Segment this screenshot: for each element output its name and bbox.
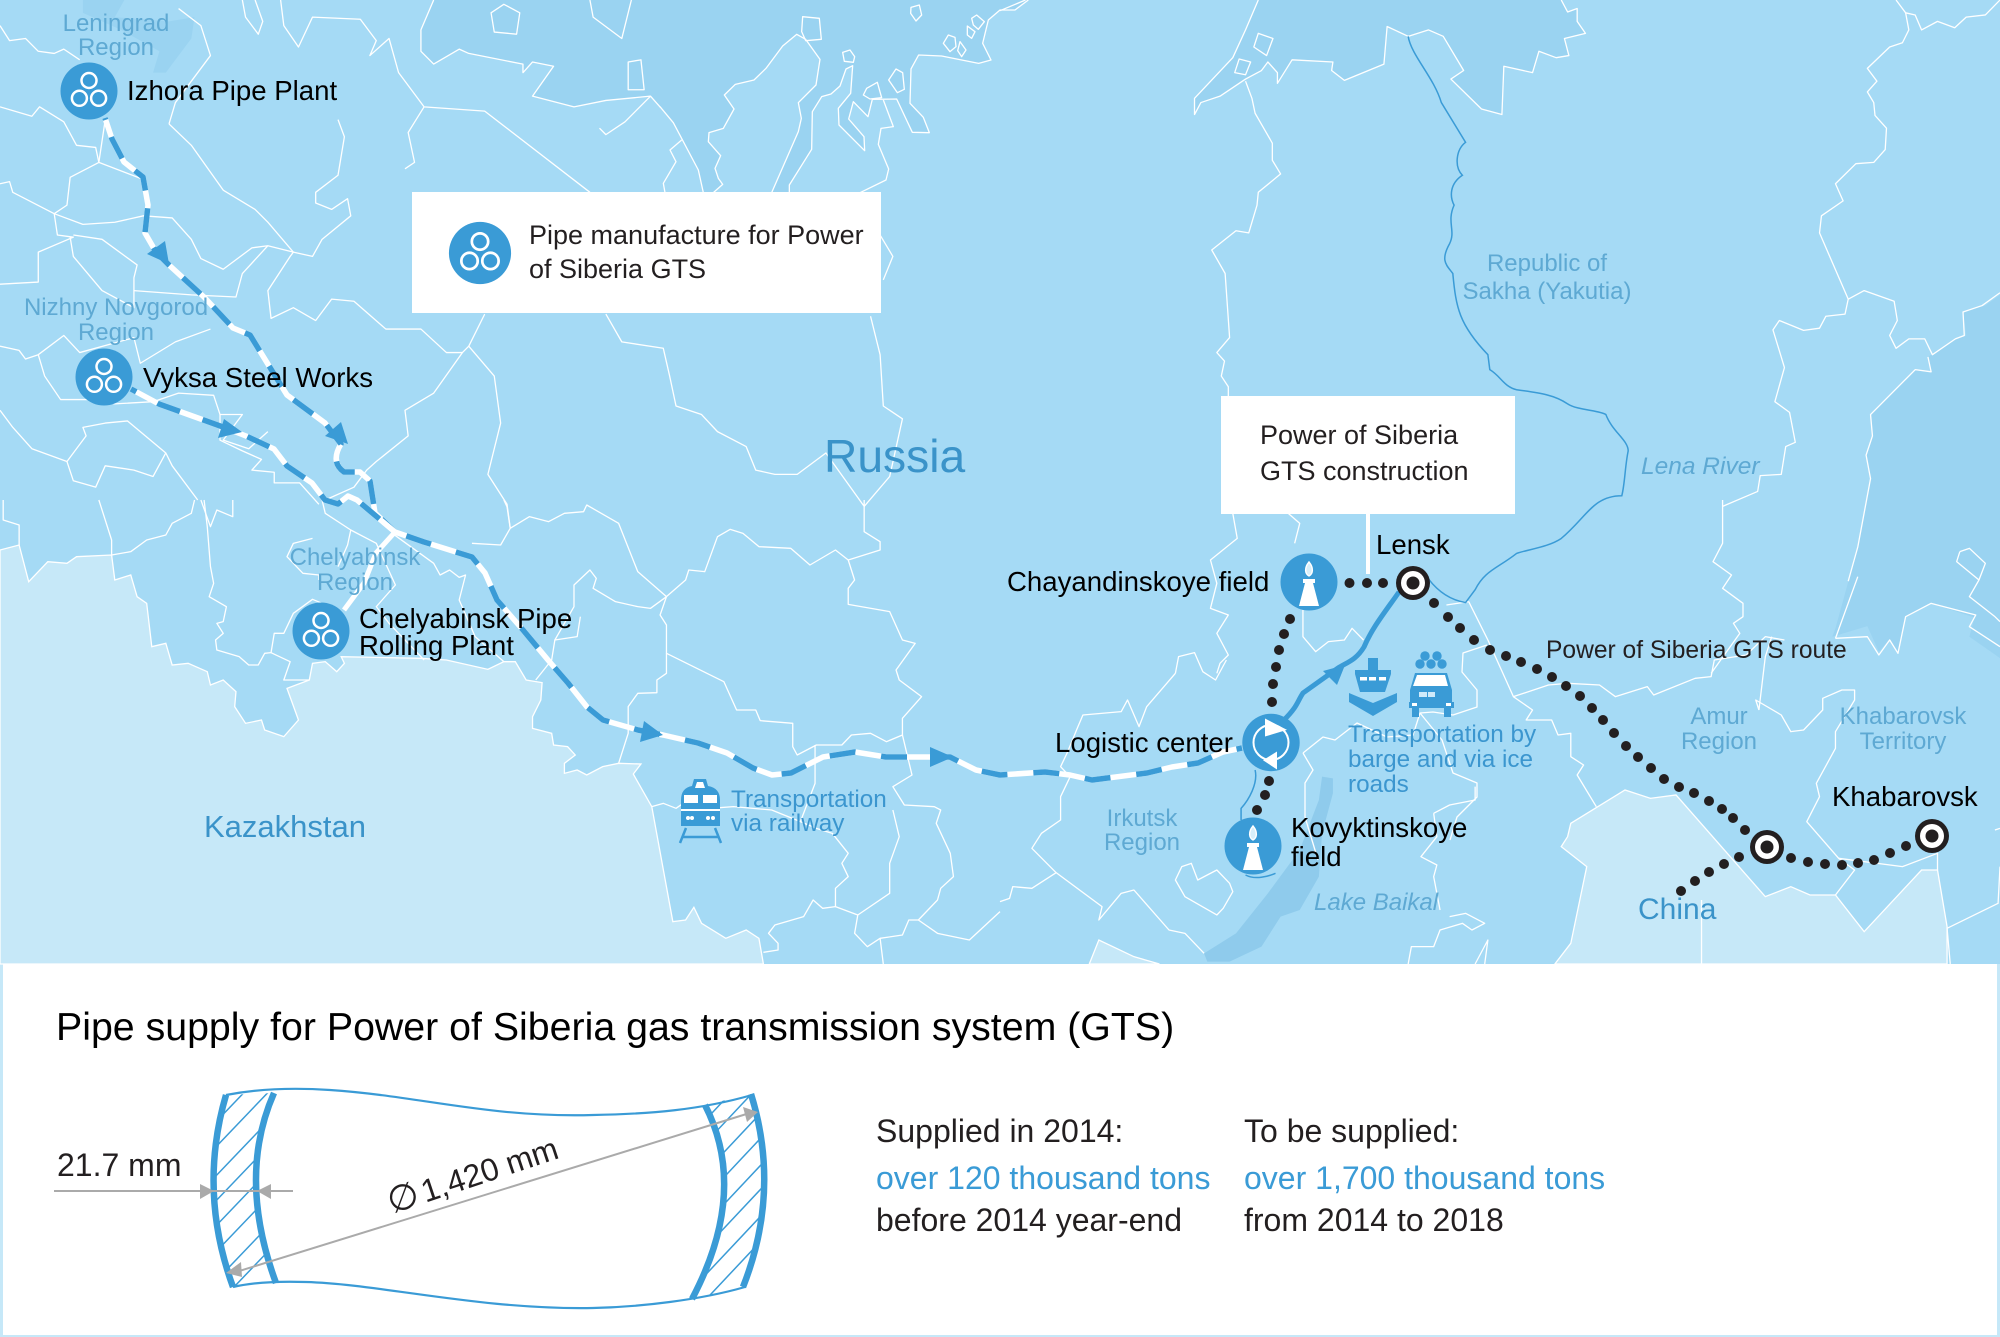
marker: Lensk [1396,566,1430,600]
map label: Yakutia: Republic of [1487,250,1607,277]
map label: Lena River: Lena River [1641,453,1760,480]
panel: pipe supply [3,964,1997,1335]
pipe route from Chelyabinsk [344,532,395,610]
place label: Kovyktinskoye: Kovyktinskoye [1291,812,1467,843]
legend text: of Siberia GTS [529,254,706,284]
map label: Nizhny Novgorod Region: Nizhny Novgorod [24,294,208,321]
pipe route from Izhora [105,118,395,532]
map label: Nizhny Novgorod Region: Region [78,319,154,346]
plant label: Vyksa: Vyksa Steel Works [143,362,373,393]
country label: Russia: Russia [824,430,965,482]
map label: Amur Region: Amur [1690,703,1748,730]
map label: Leningrad Region: Region [78,34,154,61]
pipe route from Vyksa [131,389,395,532]
country label: China: China [1638,893,1717,926]
map background [0,0,2000,964]
place label: Chayandinskoye: Chayandinskoye field [1007,566,1269,597]
callout text: Power of Siberia [1260,420,1459,450]
region borders, west north [0,0,902,528]
icon: barge [1349,658,1397,716]
barge label: Transportation by [1348,721,1537,748]
barge label: roads [1348,771,1409,798]
wall thickness dimension [54,1184,293,1199]
Lena River [1408,36,1628,603]
route label: Power of Siberia GTS route [1546,637,1847,664]
arctic coast and islands [660,0,1028,193]
stat: supplied in 2014: over 120 thousand tons [876,1160,1210,1196]
route arrows [147,241,953,767]
stat: to be supplied: To be supplied: [1244,1113,1459,1149]
panel heading: Pipe supply for Power of Siberia gas transmission system (GTS) [56,1005,1174,1049]
barge and ice road route with arrow [1284,592,1399,720]
icon: train [680,779,721,843]
callout text: GTS construction [1260,456,1469,486]
stat: to be supplied: from 2014 to 2018 [1244,1202,1504,1238]
map label: Khabarovsk Territory: Territory [1860,728,1946,755]
Kazakhstan territory [0,545,763,964]
map label: Yakutia: Sakha (Yakutia) [1463,278,1631,305]
map label: Chelyabinsk Region: Chelyabinsk [290,544,421,571]
icon: Chayandinskoye gas field [1280,554,1338,610]
plant label: Chelyabinsk: Rolling Plant [359,630,514,661]
place label: Logistic center: Logistic center [1055,727,1233,758]
legend text: Pipe manufacture for Power [529,220,864,250]
country label: Kazakhstan: Kazakhstan [204,809,366,844]
diameter value: ∅1,420 mm [382,1127,563,1223]
map label: Amur Region: Region [1681,728,1757,755]
icon: Kovyktinskoye gas field [1224,818,1282,874]
legend panel: pipe manufacture [412,192,881,313]
stat: supplied in 2014: Supplied in 2014: [876,1113,1123,1149]
map label: Khabarovsk Territory: Khabarovsk [1840,703,1967,730]
railway label: via railway [731,810,845,837]
region borders, west south [3,500,1000,964]
railway label: Transportation [731,786,887,813]
map label: Chelyabinsk Region: Region [317,569,393,596]
plant label: Chelyabinsk: Chelyabinsk Pipe [359,603,572,634]
China territory [1089,790,1947,964]
region borders near transport icons [1303,645,1487,860]
upper Lena tributary [1241,770,1276,878]
main railway route to logistic center [395,532,1242,780]
icon: Izhora plant [60,62,118,120]
barge label: barge and via ice [1348,746,1533,773]
region borders, east south [1000,500,2000,964]
plant label: Izhora: Izhora Pipe Plant [127,75,337,106]
diameter dimension [226,1107,758,1277]
map label: Lake Baikal: Lake Baikal [1314,889,1439,916]
region borders, east north [1000,0,2000,581]
icon: Chelyabinsk plant [292,602,350,660]
stat: to be supplied: over 1,700 thousand tons [1244,1160,1605,1196]
icon: truck with pipes [1409,651,1454,717]
place label: Kovyktinskoye: field [1291,841,1342,872]
marker: Khabarovsk [1915,819,1949,853]
map label: Irkutsk Region: Irkutsk [1107,805,1178,832]
map label: Irkutsk Region: Region [1104,829,1180,856]
pipe diagram [54,1088,768,1310]
icon: Vyksa plant [76,348,132,406]
seas [83,0,2000,658]
wall thickness value: 21.7 mm [57,1147,181,1183]
stat: supplied in 2014: before 2014 year-end [876,1202,1182,1238]
marker: Amur junction [1750,830,1784,864]
icon: logistic center [1242,714,1300,771]
callout connector [1366,514,1370,574]
Lake Baikal [1204,777,1333,962]
callout panel: construction [1221,396,1515,514]
map label: Leningrad Region: Leningrad [63,10,169,37]
icon: pipes [449,222,511,284]
place label: Khabarovsk: Khabarovsk [1832,781,1978,812]
Power of Siberia route dots [1252,578,1911,896]
place label: Lensk: Lensk [1376,529,1450,560]
